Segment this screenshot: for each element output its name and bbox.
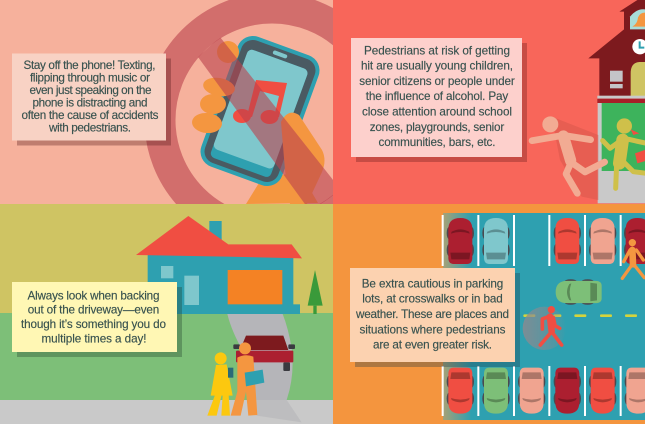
garage door — [228, 270, 282, 304]
shadow: running adult — [552, 117, 598, 200]
car — [233, 336, 295, 371]
text box: at-risk tip — [351, 38, 522, 157]
figure: running adult — [532, 116, 605, 193]
illustration: house and family — [136, 216, 323, 422]
text box: phone tip: flipping through music or — [30, 72, 150, 84]
lawn — [0, 313, 333, 401]
bottom row cars — [447, 368, 645, 414]
icon: hand and phone — [191, 31, 324, 204]
fingers — [191, 41, 324, 204]
walker shadow circle — [523, 307, 566, 350]
phone — [200, 36, 320, 186]
panel background — [333, 0, 645, 204]
text box: phone tip — [12, 54, 166, 140]
text box: driveway tip — [12, 282, 177, 352]
text box: at-risk tip: zones, playgrounds, senior — [370, 121, 504, 134]
figure: running child — [603, 118, 645, 188]
text box: phone tip: with pedestrians. — [48, 122, 131, 134]
text box: phone tip: even just speaking on the — [30, 84, 152, 97]
roof — [136, 216, 302, 258]
prohibition diagonal bar — [198, 38, 333, 204]
window — [161, 266, 173, 278]
shadow: tip box — [355, 273, 520, 367]
figure: man — [231, 342, 257, 416]
text box: parking tip: Be extra cautious in parking — [362, 278, 503, 291]
school roof and building — [588, 0, 645, 97]
text box: parking tip: are at even greater risk. — [373, 338, 492, 351]
book — [635, 149, 645, 163]
illustration: school and runners — [532, 0, 645, 203]
door arch — [631, 62, 645, 97]
text box: at-risk tip: the influence of alcohol. Pay — [366, 90, 508, 103]
text box: at-risk tip: hit are usually young children, — [361, 60, 513, 73]
sidewalk — [0, 400, 333, 424]
icon: bell — [632, 13, 645, 27]
panel: phone distraction — [0, 0, 333, 204]
text box: driveway tip: though it’s something you do — [21, 318, 166, 331]
text box: at-risk tip: communities, bars, etc. — [378, 136, 496, 149]
parking lines — [442, 215, 622, 416]
text box: parking tip: lots, at crosswalks or in bad — [362, 293, 503, 306]
shadow: tip box — [17, 287, 182, 357]
text box: at-risk tip: close attention around school — [362, 106, 512, 118]
bell window — [630, 9, 645, 29]
panel background — [333, 204, 645, 424]
bag — [228, 368, 233, 378]
cornice — [597, 96, 645, 99]
windows — [610, 71, 623, 88]
figure: red walker — [540, 306, 562, 345]
text box: phone tip: Stay off the phone! Texting, — [24, 59, 156, 72]
prohibition ring — [146, 0, 333, 204]
text box: phone tip: often the cause of accidents — [22, 109, 159, 122]
tree trunk — [313, 306, 317, 314]
panel: driveway — [0, 204, 333, 424]
wrist — [246, 172, 318, 204]
text box: parking tip — [350, 268, 515, 362]
text box: at-risk tip: Pedestrians at risk of getting — [364, 44, 510, 57]
text box: parking tip: situations where pedestrians — [360, 323, 506, 336]
tree — [308, 270, 323, 306]
driveway — [227, 314, 293, 400]
top row cars — [447, 218, 645, 264]
text box: driveway tip: out of the driveway—even — [28, 304, 159, 317]
panel: at-risk pedestrians — [333, 0, 645, 204]
panel: parking lot — [333, 204, 645, 424]
shadow: tip box — [356, 43, 527, 162]
house body — [148, 255, 293, 305]
text box: driveway tip: multiple times a day! — [42, 332, 146, 345]
people shadow on sidewalk — [253, 400, 302, 422]
text box: phone tip: phone is distracting and — [32, 96, 148, 110]
shadow: tip box — [17, 58, 171, 146]
house base — [148, 304, 300, 314]
figure: orange walker — [622, 239, 644, 278]
sky background — [0, 204, 333, 314]
clock — [632, 39, 645, 54]
panel background — [0, 0, 333, 204]
hair bow — [631, 129, 639, 135]
folder — [245, 370, 264, 386]
clock hands — [640, 41, 644, 48]
parking lot surface — [443, 213, 645, 420]
text box: at-risk tip: senior citizens or people under — [359, 75, 515, 88]
green wall panel — [602, 103, 645, 171]
illustration: cars and walkers — [442, 215, 645, 416]
moving car — [556, 279, 602, 305]
icon: music note — [233, 80, 287, 124]
figure: woman — [207, 352, 233, 416]
lower wall — [598, 103, 645, 203]
text box: driveway tip: Always look when backing — [28, 289, 160, 302]
text box: parking tip: weather. These are places and — [355, 308, 509, 321]
road dashes — [523, 314, 637, 317]
door — [184, 276, 199, 305]
chimney — [209, 221, 222, 241]
